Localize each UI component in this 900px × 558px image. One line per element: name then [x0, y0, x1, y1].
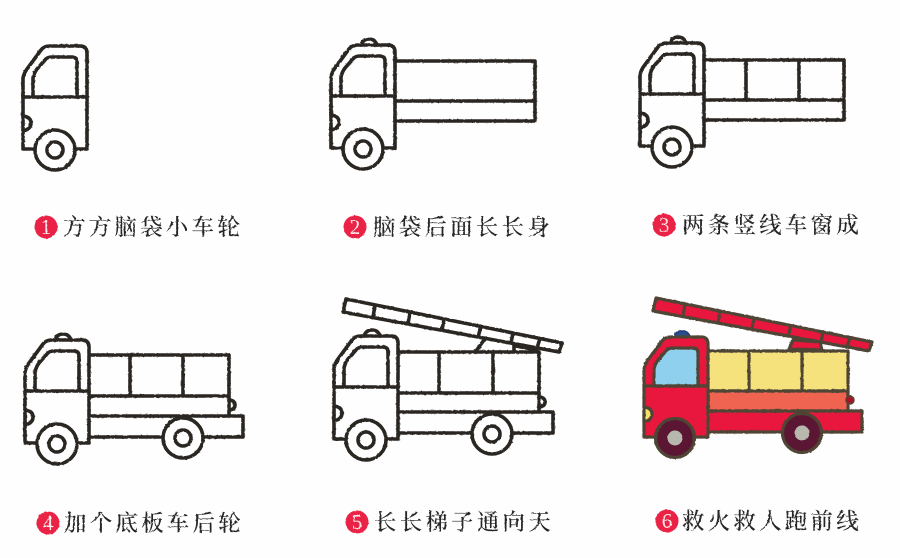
caption 2: 2 — [350, 215, 360, 239]
truck cab — [25, 334, 89, 464]
coloured ladder — [653, 298, 872, 351]
truck cab — [23, 46, 87, 170]
coloured cab — [644, 331, 708, 458]
caption 6: 6 — [662, 509, 672, 533]
panel: step 2 cab with long body — [331, 39, 553, 240]
caption 3: 3 — [659, 213, 669, 237]
rear wheel — [163, 418, 203, 458]
truck body — [395, 61, 535, 121]
panel: step 1 cab — [23, 46, 243, 240]
truck body — [90, 355, 243, 437]
truck body — [399, 352, 553, 433]
truck cab — [640, 37, 704, 167]
coloured rear wheel — [782, 414, 822, 452]
caption 1: 方方脑袋小车轮 — [63, 215, 243, 240]
ladder — [343, 299, 562, 352]
caption 5: 5 — [352, 510, 362, 534]
panel: step 4 chassis and rear wheel — [25, 334, 244, 536]
truck cab — [331, 39, 395, 169]
truck body — [704, 60, 844, 120]
caption 5: 长长梯子通向天 — [374, 510, 554, 535]
caption 6: 救火救人跑前线 — [682, 509, 862, 534]
panel: step 5 ladder — [334, 299, 562, 535]
caption 4: 4 — [43, 511, 54, 535]
caption 3: 两条竖线车窗成 — [682, 213, 862, 238]
rear wheel — [472, 414, 512, 454]
panel: step 3 windows — [640, 37, 862, 238]
truck cab — [334, 330, 398, 460]
caption 1: 1 — [41, 215, 51, 239]
panel: step 6 coloured fire truck — [644, 298, 872, 534]
caption 4: 加个底板车后轮 — [64, 511, 244, 536]
caption 2: 脑袋后面长长身 — [373, 215, 553, 240]
coloured body — [707, 351, 862, 432]
